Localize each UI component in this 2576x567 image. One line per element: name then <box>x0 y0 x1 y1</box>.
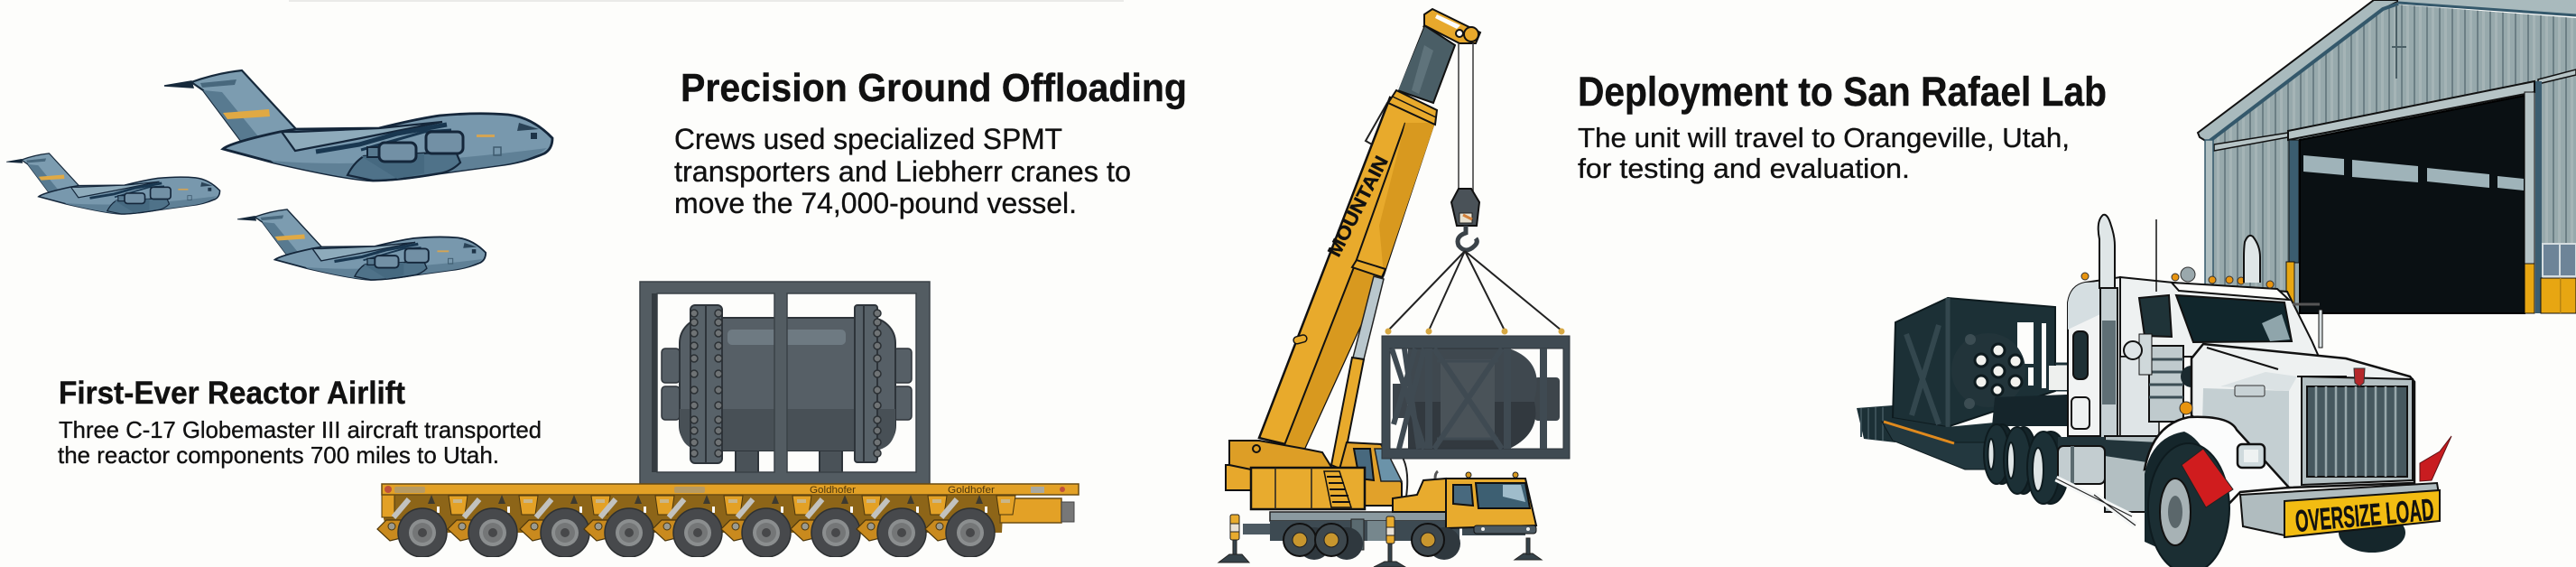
text block: deployment description <box>1578 122 2070 184</box>
front bumper <box>2240 483 2440 535</box>
text block: deployment description: for testing and evaluation. <box>1578 153 1910 184</box>
panel: airlift <box>6 70 552 469</box>
fuel tank and steps <box>2056 436 2159 525</box>
text block: airlift description: the reactor components 700 miles to Utah. <box>58 442 499 469</box>
icon: San Rafael Lab building <box>2198 0 2576 313</box>
red warning flag right <box>2420 436 2451 481</box>
icon: SPMT transporter <box>377 484 1079 557</box>
crane cables and hook <box>1385 43 1565 334</box>
text block: offloading description: move the 74,000-pound vessel. <box>674 187 1077 219</box>
oversize load sign <box>2284 490 2440 539</box>
text block: deployment description: The unit will travel to Orangeville, Utah, <box>1578 122 2070 153</box>
icon: suspended reactor crate <box>1382 336 1570 459</box>
truck cab and sleeper <box>2068 267 2322 442</box>
icon: large C-17 aircraft <box>164 70 552 181</box>
text block: offloading description: Crews used specialized SPMT <box>674 123 1062 155</box>
icon: medium C-17 aircraft <box>237 209 486 280</box>
heading: Deployment to San Rafael Lab: Deployment to San Rafael Lab <box>1578 69 2107 115</box>
hood and grille <box>2180 344 2414 489</box>
exhaust stacks and antenna <box>2099 215 2260 440</box>
crane boom <box>1259 9 1480 449</box>
panel: deployment text <box>1578 69 2107 184</box>
text block: offloading description <box>674 123 1131 219</box>
front fender and wheel <box>2145 417 2405 567</box>
oversize load sign: OVERSIZE LOAD <box>2293 493 2435 539</box>
truck rear wheels <box>1984 424 2069 504</box>
text block: airlift description: Three C-17 Globemaster III aircraft transported <box>59 416 542 443</box>
heading: Precision Ground Offloading: Precision Ground Offloading <box>681 66 1187 110</box>
crane carrier <box>1219 441 1542 567</box>
label: Goldhofer second: Goldhofer <box>948 485 995 496</box>
label: Goldhofer: Goldhofer <box>810 485 856 496</box>
text block: offloading description: transporters and Liebherr cranes to <box>674 155 1131 188</box>
text block: airlift description <box>58 416 542 469</box>
heading: First-Ever Reactor Airlift: First-Ever Reactor Airlift <box>59 376 405 411</box>
icon: truck hauling reactor <box>1857 215 2451 567</box>
hydraulic ram <box>1331 276 1384 469</box>
icon: mobile crane with crate <box>1219 9 1570 567</box>
label: MOUNTAIN: MOUNTAIN <box>1324 153 1393 260</box>
icon: reactor vessel in frame <box>640 282 930 484</box>
icon: small C-17 aircraft left <box>6 153 220 214</box>
panel: ground offloading <box>377 66 1187 557</box>
reactor crate on trailer <box>1857 298 2071 469</box>
